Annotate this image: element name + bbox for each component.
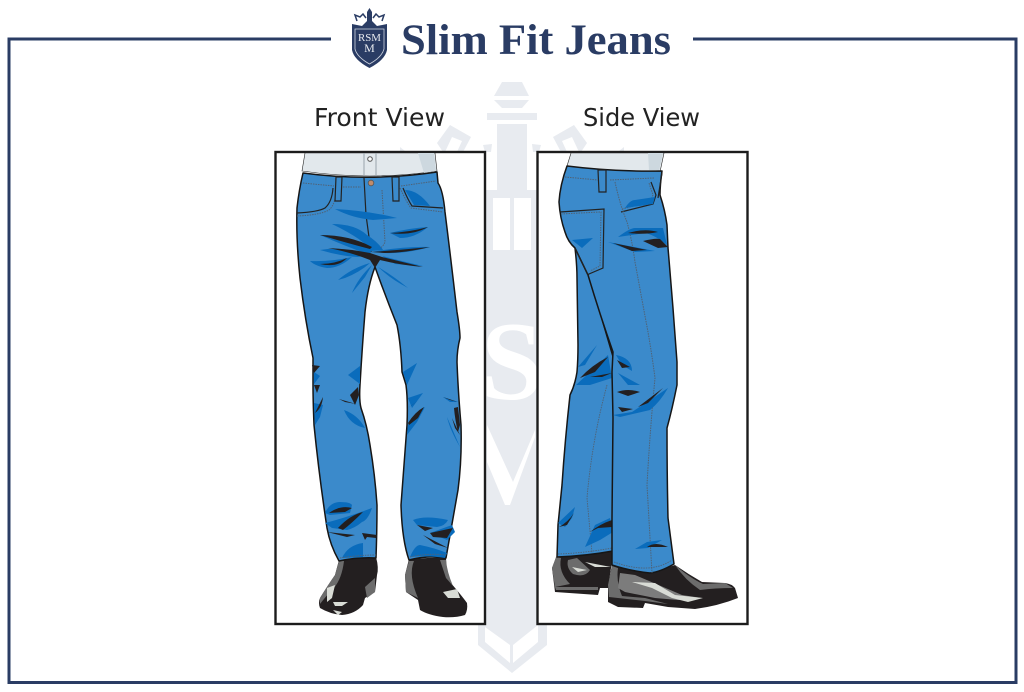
shirt side: [567, 153, 664, 172]
logo crest: RSM: [358, 32, 381, 44]
shirt front: [302, 153, 437, 177]
jeans front: [297, 172, 461, 561]
panel: side view: [538, 152, 748, 624]
pockets and seams: [560, 170, 662, 573]
background sword watermark: [400, 82, 624, 673]
jeans rear leg: [557, 248, 614, 557]
heading: side view: Side View: [583, 103, 700, 132]
wrinkles mid blue: [310, 190, 460, 558]
wrinkles black: [312, 227, 460, 548]
wrinkles mid blue: [572, 197, 668, 549]
jeans front leg: [559, 166, 677, 573]
shoes side: [552, 548, 738, 609]
shoes front: [319, 557, 467, 617]
waistband and pockets: [297, 177, 443, 252]
logo crest: M: [364, 41, 375, 55]
heading: front view: Front View: [314, 103, 445, 132]
wrinkles black: [613, 230, 668, 547]
logo crest: [352, 8, 387, 68]
title: Slim Fit Jeans: [401, 17, 671, 64]
panel: front view: [276, 152, 485, 624]
background sword watermark: S: [481, 300, 543, 424]
